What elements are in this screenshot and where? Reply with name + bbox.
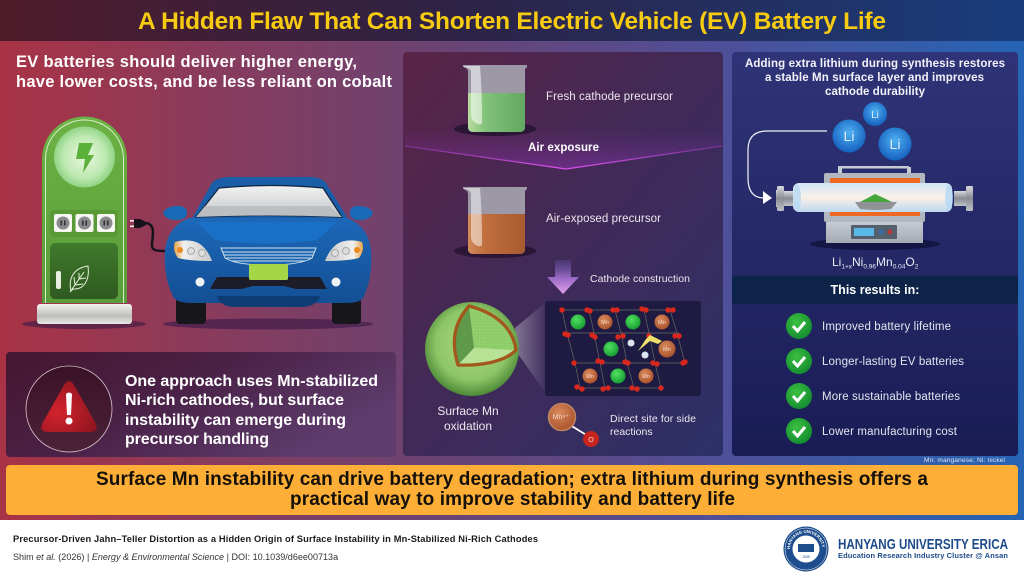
label: surface Mn oxidation: Surface Mn: [437, 404, 499, 418]
air exposure chevron: [405, 128, 722, 169]
label: air-exposed precursor: Air-exposed precursor: [546, 213, 661, 225]
label: surface Mn oxidation: [437, 404, 499, 433]
warning text: [125, 373, 378, 448]
result: lower cost: [786, 418, 958, 444]
paper title: Precursor-Driven Jahn–Teller Distortion as a Hidden Origin of Surface Instability in Mn-Stabilized Ni-Rich Cathodes: [13, 534, 538, 544]
illustration: tube furnace: [776, 166, 973, 250]
air intake: [210, 277, 327, 289]
grille: [221, 248, 316, 265]
crystal structure: Mn: [586, 374, 594, 380]
citation: Shim et al. (2026) | Energy & Environmental Science | DOI: 10.1039/d6ee00713a: [13, 552, 339, 562]
chemical formula: 0.04: [893, 264, 906, 270]
label: direct site: reactions: [610, 426, 653, 438]
results heading: [732, 276, 1018, 304]
chemical formula: 0.96: [863, 264, 876, 270]
chemical formula: Mn: [876, 255, 893, 269]
panel: extra lithium solution: [732, 52, 1018, 456]
wheels: [176, 295, 361, 324]
warning text: precursor handling: [125, 431, 269, 448]
icon: lithium atoms: [832, 102, 912, 160]
abbreviation note: Mn: manganese; Ni: nickel: [924, 457, 1006, 464]
title banner: [0, 0, 1024, 41]
crystal structure: Mn: [658, 320, 666, 326]
label: surface Mn oxidation: oxidation: [444, 419, 492, 433]
logo: university seal: HANYANG UNIVERSITY: [786, 530, 825, 549]
illustration: blue electric car: [163, 177, 373, 330]
warning text: Ni-rich cathodes, but surface: [125, 392, 344, 409]
icon: Mn-O bond: O: [588, 437, 594, 444]
footer: [0, 520, 1024, 572]
icon: lightning bolt: [76, 143, 94, 173]
panel: air exposure process: [403, 52, 723, 456]
label: direct site: Direct site for side: [610, 413, 696, 425]
chemical formula: 1+x: [841, 264, 853, 270]
icon: leaf: [70, 266, 88, 292]
icon: Mn-O bond: [548, 404, 599, 447]
result: improved lifetime: [786, 313, 951, 339]
logo: university name: [838, 536, 1008, 560]
license plate: [249, 264, 288, 280]
conclusion banner: [6, 465, 1018, 515]
solution heading: cathode durability: [825, 86, 926, 98]
intro text: have lower costs, and be less reliant on cobalt: [16, 73, 392, 91]
intro text: [16, 53, 392, 91]
icon: lithium atoms: Li: [890, 136, 900, 152]
arrow: cathode construction: [547, 260, 579, 294]
result: improved lifetime: Improved battery lifetime: [822, 321, 951, 333]
crystal structure: Mn: [642, 374, 650, 380]
crystal structure: [545, 301, 701, 396]
fog lights: [196, 278, 340, 286]
result: sustainable: [786, 383, 960, 409]
illustration: cathode particle sphere: [425, 302, 519, 396]
arrow: lithium into furnace: [748, 131, 827, 204]
chemical formula: 2: [915, 264, 919, 270]
icon: plug and cable: [130, 219, 166, 251]
mirrors: [163, 206, 373, 220]
warning text: instability can emerge during: [125, 412, 346, 429]
chemical formula: Ni: [852, 255, 863, 269]
result: longer-lasting: [786, 348, 964, 374]
chemical formula: O: [905, 255, 915, 269]
icon: lithium atoms: Li: [871, 110, 879, 121]
crystal structure: Mn: [663, 347, 671, 353]
air exposure chevron: Air exposure: [528, 142, 599, 154]
headlights: [174, 240, 212, 261]
chemical formula: Li: [832, 255, 841, 269]
title banner: A Hidden Flaw That Can Shorten Electric Vehicle (EV) Battery Life: [138, 8, 886, 35]
illustration: EV charging station: [22, 117, 146, 329]
icon: lithium atoms: Li: [844, 128, 854, 144]
result: lower cost: Lower manufacturing cost: [822, 426, 958, 438]
result: sustainable: More sustainable batteries: [822, 391, 960, 403]
logo: university name: Education Research Industry Cluster @ Ansan: [838, 551, 1008, 560]
logo: university seal: 1939: [802, 555, 810, 559]
panel: warning callout: [6, 352, 396, 457]
label: direct site: [610, 413, 696, 438]
crystal structure: Mn: [601, 320, 609, 326]
icon: sockets: [54, 214, 115, 232]
conclusion banner: practical way to improve stability and battery life: [290, 489, 735, 510]
results heading: This results in:: [831, 283, 919, 297]
zoom beam: [515, 303, 545, 392]
solution heading: Adding extra lithium during synthesis restores: [745, 58, 1005, 70]
beaker: fresh precursor: [454, 65, 536, 136]
icon: Mn-O bond: Mn⁴⁺: [553, 414, 570, 421]
label: fresh precursor: Fresh cathode precursor: [546, 91, 673, 103]
beaker: air-exposed precursor: [454, 187, 536, 258]
warning text: One approach uses Mn-stabilized: [125, 373, 378, 390]
conclusion banner: Surface Mn instability can drive battery degradation; extra lithium during synthesis offers a: [96, 469, 928, 490]
solution heading: [745, 58, 1005, 98]
icon: warning triangle: [26, 366, 112, 452]
intro text: EV batteries should deliver higher energy,: [16, 53, 357, 71]
label: cathode construction: Cathode construction: [590, 273, 690, 285]
result: longer-lasting: Longer-lasting EV batteries: [822, 356, 964, 368]
logo: university seal: [784, 526, 828, 572]
windshield: [196, 186, 342, 217]
solution heading: a stable Mn surface layer and improves: [765, 72, 984, 84]
